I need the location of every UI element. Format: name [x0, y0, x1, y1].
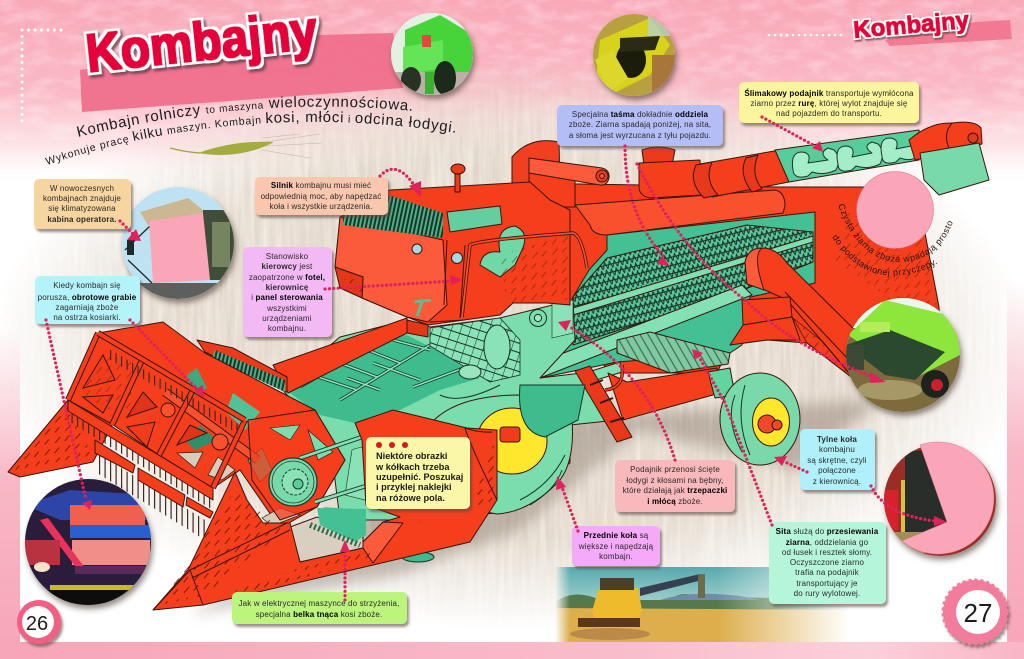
callout: feeder: Podajnik przenosi ścięte [630, 465, 720, 474]
cab and engine [335, 164, 587, 325]
callout: cutter bar: Jak w elektrycznej maszynce do strzyżenia, [238, 599, 400, 608]
callout: engine [255, 177, 388, 215]
sticker placeholder: grain [856, 172, 934, 248]
callout: auger: ziarno przez rurę, której wylot znajduje się [751, 99, 908, 108]
mint threshing window [540, 212, 815, 378]
sticker placeholder: cab [149, 213, 210, 283]
photo: rear tyre with sticker placeholder [884, 442, 996, 556]
red arm [745, 248, 870, 380]
callout: reel: porusza, obrotowe grabie [38, 293, 137, 302]
arrow: front wheel [556, 476, 578, 531]
red block and lower bar [608, 297, 800, 420]
grain tank base [639, 147, 702, 198]
callout: cab: W nowoczesnych [50, 184, 114, 193]
photo: combine header [25, 479, 151, 605]
arrow: cutter bar [340, 540, 350, 600]
ground window under header [290, 508, 366, 562]
callout: driver station: zaopatrzone w fotel, [249, 273, 325, 282]
arrow: engine [380, 169, 421, 197]
callout: sieves: od łusek i resztek słomy. [782, 548, 872, 557]
callout: sieves [769, 522, 886, 604]
callout: reel: zagarniają zboże [56, 303, 119, 312]
page number 26 [17, 600, 61, 644]
callout: reel: na ostrza kosiarki. [53, 313, 121, 322]
callout: belt: Specjalna taśma dokładnie oddziela [572, 110, 709, 119]
reel bars and comb [68, 400, 213, 500]
callout: driver station: kombajnu. [268, 324, 306, 333]
rear body [512, 183, 940, 395]
running header right: Kombajny [852, 7, 971, 44]
red strip to header [197, 318, 428, 393]
arrow: reel right [130, 320, 204, 398]
callout: rear wheels: są skrętne, czyli [807, 456, 867, 465]
arrow: driver station [325, 275, 463, 289]
page number 27: 27 [964, 598, 992, 628]
straw walkers rack [500, 225, 813, 410]
page number 26: 26 [26, 613, 48, 635]
combine harvester illustration [8, 122, 989, 615]
callout: front wheels [572, 526, 660, 566]
reel frame [68, 322, 345, 528]
reel gaps and windows [187, 368, 207, 398]
note: stickers: w kółkach trzeba [375, 462, 450, 472]
callout: sieves: ziarna, oddzielania go [786, 538, 869, 547]
arrow: rear wheel [774, 456, 807, 472]
callout: auger [739, 82, 919, 123]
callout: driver station [243, 247, 332, 337]
arrow: cab [120, 221, 141, 241]
callout: driver station: urządzeniami [262, 314, 312, 323]
callout: cab: kombajnach znajduje [43, 194, 121, 203]
top cylinder and post [512, 141, 609, 207]
intro text: Wykonuje pracę kilku maszyn. Kombajn kosi, młóci i odcina łodygi. [44, 110, 455, 164]
photo: green combine rear [391, 13, 473, 95]
running header right [769, 7, 1012, 46]
note: stickers [366, 437, 470, 509]
callout: sieves: transportujący je [796, 579, 858, 588]
callout: rear wheels: z kierownicą. [813, 477, 861, 486]
long cutter teeth [97, 453, 205, 540]
callout: engine: Silnik kombajnu musi mieć [271, 181, 371, 190]
front wheel [402, 385, 585, 562]
pulley and belts [269, 437, 366, 506]
callout: rear wheels: kombajnu [819, 445, 855, 454]
callout: rear wheels: połączone [818, 466, 856, 475]
arrow: auger [762, 117, 823, 152]
callout: belt: zboże. Ziarna spadają poniżej, na sita, [569, 120, 711, 129]
callout: cab [34, 179, 131, 229]
note: stickers: Niektóre obrazki [376, 451, 447, 461]
callout: feeder: które działają jak trzepaczki [623, 486, 727, 495]
mint body [280, 300, 618, 535]
note: stickers: uzupełnić. Poszukaj [376, 472, 463, 482]
callout: sieves: do rury wylotowej. [794, 589, 860, 598]
callout: engine: odpowiednią moc, aby napędzać [261, 192, 381, 201]
note: stickers: na różowe pola. [376, 493, 445, 503]
callout: rear wheels: Tylne koła [817, 435, 857, 444]
callout: feeder: łodygi z kłosami na bębny, [626, 476, 724, 485]
arrow: belt to straw walkers [625, 146, 670, 266]
callout: sieves: Oczyszczone ziarno [790, 558, 865, 567]
callout: front wheels: Przednie koła są [584, 531, 649, 540]
callout: cutter bar [232, 592, 407, 624]
auger tube [693, 122, 989, 198]
title banner [80, 0, 403, 112]
callout: front wheels: kombajn. [599, 552, 633, 561]
arrow: feeder [558, 320, 675, 460]
arrow: reel left [46, 320, 92, 510]
curved caption: grain falls: do podstawionej przyczepy. [832, 235, 938, 278]
callout: belt [557, 105, 723, 146]
callout: driver station: kierowcy jest [262, 262, 313, 271]
callout: belt: a słoma jest wyrzucana z tyłu pojazdu. [569, 131, 711, 140]
callout: driver station: i panel sterowania [251, 293, 323, 302]
callout: driver station: wszystkimi [266, 304, 307, 313]
left divider wedge [8, 333, 115, 477]
callout: driver station: kierownicę [266, 283, 309, 292]
photo: green combine unloading [846, 298, 960, 412]
photo: operator cab with sticker placeholder [122, 187, 234, 299]
callout: cab: się klimatyzowana [48, 204, 116, 213]
photo: harvest field [555, 567, 850, 642]
callout: front wheels: większe i napędzają [578, 542, 654, 551]
note: stickers: i przyklej naklejki [376, 482, 452, 492]
reel spokes [68, 333, 245, 488]
callout: sieves: trafia na podajnik [795, 568, 860, 577]
ground shadow [190, 400, 880, 615]
wheat field texture background [19, 78, 999, 615]
icon: wheat ear [170, 134, 322, 158]
rear wheel [708, 368, 800, 465]
callout: feeder [615, 460, 735, 512]
callout: sieves: Sita służą do przesiewania [776, 527, 879, 536]
callout: reel: Kiedy kombajn się [53, 281, 121, 290]
callout: reel [35, 276, 140, 324]
callout: rear wheels [800, 429, 875, 490]
photo: yellow combine [593, 14, 675, 96]
ladder [575, 365, 632, 442]
intro text: Kombajn rolniczy to maszyna wieloczynnościowa. [76, 96, 412, 137]
callout: auger: nad pojazdem do transportu. [776, 109, 882, 118]
callout: cab: kabina operatora. [47, 215, 117, 224]
callout: auger: Ślimakowy podajnik transportuje wymłócona [744, 89, 914, 98]
hood band [575, 190, 785, 235]
arrow: sieves [692, 349, 772, 525]
grain rack [282, 335, 480, 423]
page number 27 [943, 580, 1007, 644]
decorative dotted frame left [22, 30, 62, 127]
curved caption: grain falls: Czysta ziarna zboża wpadają prosto [838, 204, 952, 263]
sticker placeholder: tyre [902, 442, 994, 554]
callout: cutter bar: specjalna belka tnąca kosi zboże. [256, 610, 382, 619]
right header side panel [153, 410, 497, 610]
callout: feeder: i młócą zboże. [647, 497, 703, 506]
callout: driver station: Stanowisko [266, 252, 309, 261]
arrow: belt to grain outlet [637, 164, 886, 383]
callout: engine: koła i wszystkie urządzenia. [270, 202, 372, 211]
arrow: tyre [871, 486, 947, 526]
